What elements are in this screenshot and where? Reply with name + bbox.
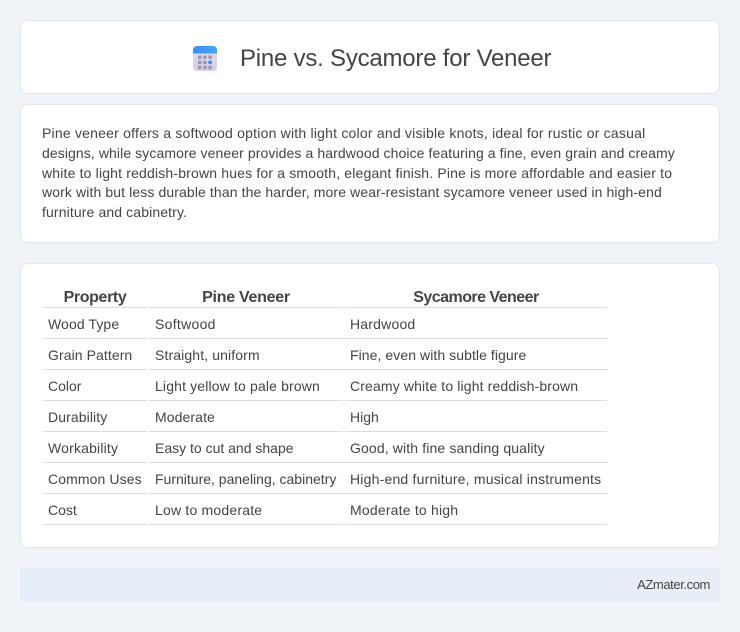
row: grain pattern: Grain Pattern: [48, 347, 132, 363]
summary paragraph: Pine veneer offers a softwood option with light color and visible knots, ideal for rustic or casual: [42, 125, 645, 141]
row: durability: [43, 409, 607, 432]
header panel: [20, 20, 720, 94]
row: workability: [43, 440, 607, 463]
row: wood type: Wood Type: [48, 316, 119, 332]
row: grain pattern: Fine, even with subtle figure: [350, 347, 526, 363]
row: cost: Low to moderate: [155, 502, 262, 518]
row: color: Creamy white to light reddish-brown: [350, 378, 578, 394]
summary paragraph: white to light reddish-brown hues for a smooth, elegant finish. Pine is more affordable and easier to: [42, 165, 672, 181]
row: common uses: High-end furniture, musical instruments: [350, 471, 601, 487]
summary paragraph: furniture and cabinetry.: [42, 204, 187, 220]
row: workability: Workability: [48, 440, 118, 456]
row: color: [43, 378, 607, 401]
row: durability: Durability: [48, 409, 107, 425]
row: workability: Easy to cut and shape: [155, 440, 294, 456]
row: common uses: Furniture, paneling, cabinetry: [155, 471, 336, 487]
icon: calendar: [193, 46, 217, 71]
row: cost: Cost: [48, 502, 77, 518]
row: common uses: [43, 471, 607, 494]
table header row: Pine Veneer: [202, 289, 290, 306]
row: cost: [43, 502, 607, 525]
row: wood type: Softwood: [155, 316, 216, 332]
row: color: Light yellow to pale brown: [155, 378, 320, 394]
table header row: Sycamore Veneer: [413, 289, 539, 306]
row: cost: Moderate to high: [350, 502, 458, 518]
summary paragraph: work with but less durable than the harder, more wear-resistant sycamore veneer used in high-end: [42, 184, 662, 200]
footer brand: AZmater.com: [637, 577, 710, 592]
row: durability: Moderate: [155, 409, 215, 425]
summary paragraph: [42, 125, 675, 220]
row: durability: High: [350, 409, 379, 425]
table header row: [43, 289, 607, 308]
row: wood type: [43, 316, 607, 339]
panel: summary text: [20, 104, 720, 243]
panel: comparison table: [20, 263, 720, 548]
title: Pine vs. Sycamore for Veneer: [240, 45, 551, 72]
table header row: Property: [64, 289, 126, 306]
row: workability: Good, with fine sanding quality: [350, 440, 545, 456]
row: wood type: Hardwood: [350, 316, 415, 332]
footer bar: [20, 568, 720, 602]
row: grain pattern: Straight, uniform: [155, 347, 260, 363]
summary paragraph: designs, while sycamore veneer provides a hardwood choice featuring a fine, even grain and creamy: [42, 145, 675, 161]
row: grain pattern: [43, 347, 607, 370]
row: common uses: Common Uses: [48, 471, 142, 487]
row: color: Color: [48, 378, 81, 394]
